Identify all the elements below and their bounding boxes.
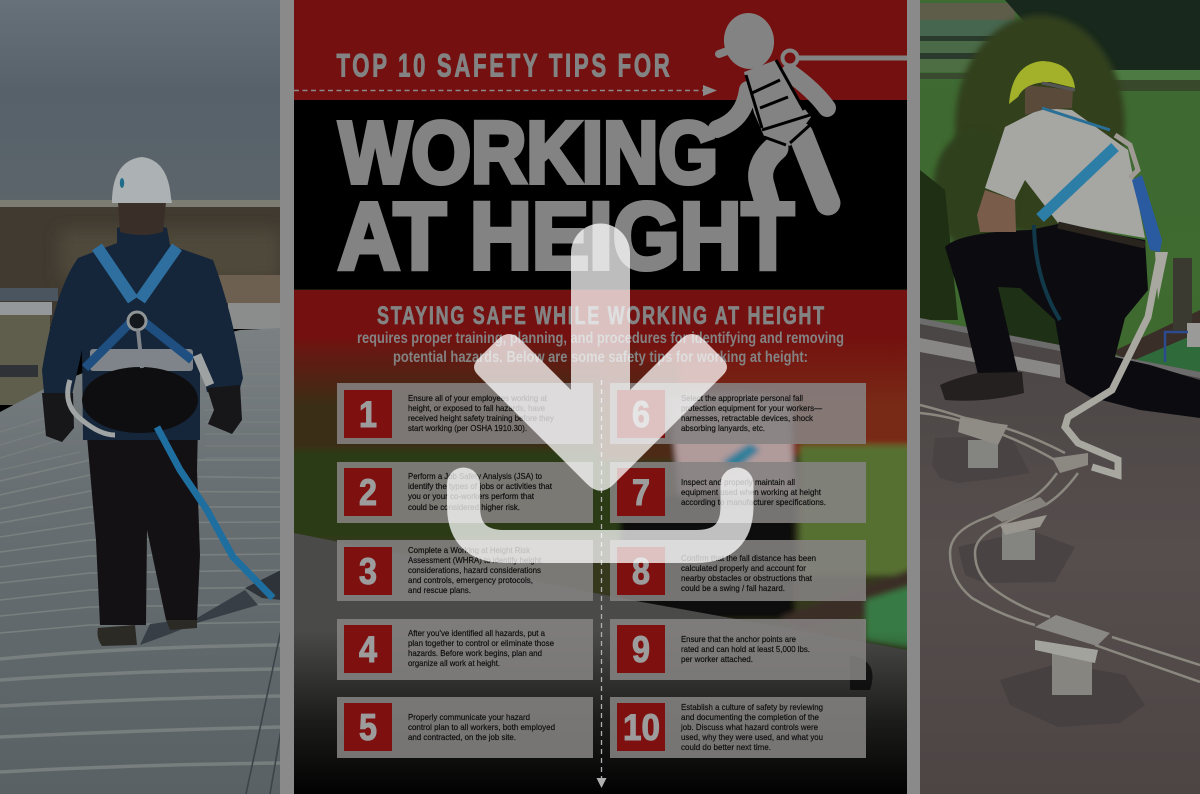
panel: tip 6: Select the appropriate personal fall xyxy=(681,394,803,403)
panel: tip 9 xyxy=(610,619,866,680)
photo: worker on metal roof (left) xyxy=(0,0,281,794)
panel: tip 4: 4 xyxy=(359,629,377,670)
intro text xyxy=(357,330,844,366)
panel: tip 10 xyxy=(610,697,866,758)
panel: tip 8: could be a swing / fall hazard. xyxy=(681,584,785,593)
panel: tip 1 xyxy=(337,383,593,444)
heading: top 10 safety tips: TOP 10 SAFETY TIPS FOR xyxy=(336,47,670,84)
panel: tip 4 xyxy=(337,619,593,680)
worker figure right xyxy=(940,61,1200,475)
icon: harnessed worker on lifeline xyxy=(717,10,907,206)
subheading: STAYING SAFE WHILE WORKING AT HEIGHT xyxy=(377,301,825,330)
title: working: WORKING xyxy=(339,104,718,202)
arrow: dashed header arrow xyxy=(294,85,717,96)
panel: tip 10: and documenting the completion of the xyxy=(681,713,819,722)
panel: tip 9: per worker attached. xyxy=(681,655,753,664)
panel: tip 1: start working (per OSHA 1910.30). xyxy=(408,424,527,433)
panel: tip 9: Ensure that the anchor points are xyxy=(681,635,796,644)
panel: tip 2: you or your co-workers perform that xyxy=(408,492,535,501)
panel: tip 7: Inspect and properly maintain all xyxy=(681,478,795,487)
panel: tip 5: 5 xyxy=(359,707,377,748)
panel: tip 5 xyxy=(337,697,593,758)
worker figure left xyxy=(42,157,273,646)
panel: tip 3: considerations, hazard considerations xyxy=(408,566,541,575)
roof anchor system xyxy=(920,405,1200,727)
panel: tip 6: 6 xyxy=(632,394,650,435)
panel: tip 8: calculated properly and account for xyxy=(681,564,806,573)
intro text: potential hazards. Below are some safety tips for working at height: xyxy=(393,349,808,366)
panel: tip 1: received height safety training before they xyxy=(408,414,555,423)
panel: tip 5: Properly communicate your hazard xyxy=(408,713,530,722)
intro text: requires proper training, planning, and procedures for identifying and removing xyxy=(357,330,844,347)
panel: tip 4: hazards. Before work begins, plan and xyxy=(408,649,542,658)
panel: tip 7: according to manufacturer specifications. xyxy=(681,498,826,507)
panel: tip 3: 3 xyxy=(359,551,377,592)
panel: tip 9: rated and can hold at least 5,000 lbs. xyxy=(681,645,810,654)
panel: tip 1: height, or exposed to fall hazards, have xyxy=(408,404,545,413)
header band: black xyxy=(294,100,907,289)
panel: tip 3: Assessment (WHRA) to identify height xyxy=(408,556,542,565)
panel: tip 2: could be considered higher risk. xyxy=(408,503,520,512)
panel: tip 6: harnesses, retractable devices, shock xyxy=(681,414,814,423)
icon: large download arrow overlay xyxy=(464,224,737,546)
header band: red xyxy=(294,0,907,100)
panel: tip 8: nearby obstacles or obstructions that xyxy=(681,574,813,583)
panel: tip 2: 2 xyxy=(359,472,377,513)
panel: tip 2: identify the types of jobs or activities that xyxy=(408,482,553,491)
panel: tip 10: Establish a culture of safety by reviewing xyxy=(681,703,823,712)
panel: tip 10: used, why they were used, and what you xyxy=(681,733,823,742)
arrow: central dashed arrow xyxy=(596,380,606,788)
panel: tip 1: Ensure all of your employees working at xyxy=(408,394,548,403)
panel: tip 4: After you've identified all hazards, put a xyxy=(408,629,545,638)
panel: tip 8: Confirm that the fall distance has been xyxy=(681,554,816,563)
panel: tip 10: job. Discuss what hazard controls were xyxy=(680,723,818,732)
photo: worker kneeling on flat roof (right) xyxy=(920,0,1200,794)
title: at height: AT HEIGHT xyxy=(338,184,794,290)
panel: tip 6: protection equipment for your workers— xyxy=(681,404,823,413)
panel: tip 10: could do better next time. xyxy=(681,743,771,752)
poster background photo xyxy=(294,289,907,776)
panel: tip 10: 10 xyxy=(623,707,660,748)
panel: tip 8 xyxy=(610,540,866,601)
panel: tip 7 xyxy=(610,462,866,523)
panel: tip 6: absorbing lanyards, etc. xyxy=(681,424,765,433)
panel: tip 2 xyxy=(337,462,593,523)
panel: tip 4: organize all work at height. xyxy=(408,659,500,668)
panel: tip 5: and contracted, on the job site. xyxy=(408,733,516,742)
panel: tip 3 xyxy=(337,540,593,601)
panel: tip 1: 1 xyxy=(359,394,377,435)
panel: tip 9: 9 xyxy=(632,629,650,670)
panel: tip 7: 7 xyxy=(632,472,650,513)
panel: tip 6 xyxy=(610,383,866,444)
gray border strips of poster xyxy=(280,0,920,794)
panel: tip 3: Complete a Working at Height Risk xyxy=(408,546,531,555)
panel: tip 7: equipment used when working at height xyxy=(681,488,822,497)
panel: tip 5: control plan to all workers, both employed xyxy=(408,723,555,732)
panel: tip 4: plan together to control or eliminate those xyxy=(408,639,554,648)
panel: tip 3: and controls, emergency protocols, xyxy=(408,576,533,585)
panel: tip 8: 8 xyxy=(632,551,650,592)
panel: tip 2: Perform a Job Safety Analysis (JSA) to xyxy=(408,472,542,481)
panel: tip 3: and rescue plans. xyxy=(408,586,471,595)
